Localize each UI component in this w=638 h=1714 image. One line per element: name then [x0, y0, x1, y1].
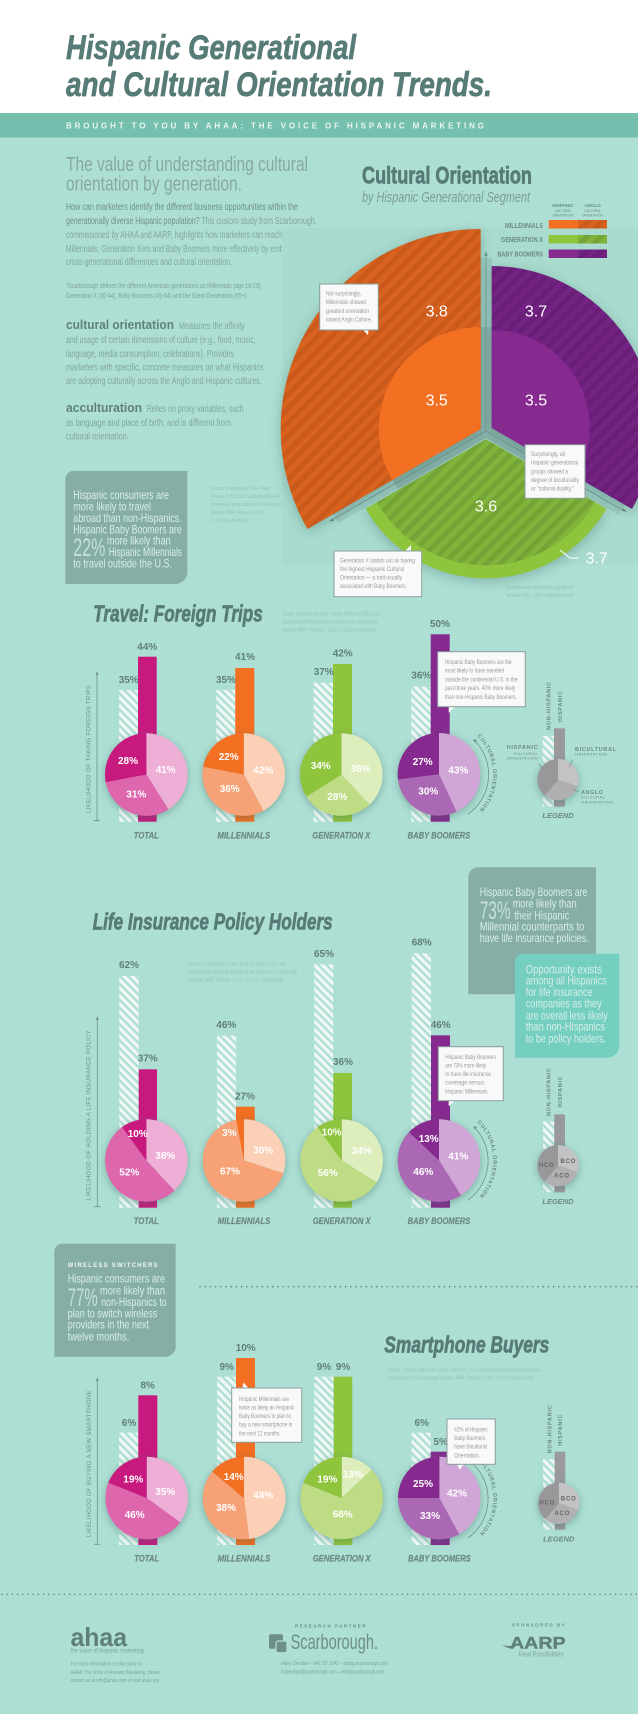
callout box: life insurance 73%: more likely than	[513, 897, 577, 911]
insurance chart: generation x: 34%	[352, 1146, 372, 1157]
sector: baby boomers	[492, 266, 638, 509]
axis: travel likelihood: LIKELIHOOD OF TAKING FOREIGN TRIPS	[86, 684, 92, 813]
travel chart: generation x: 37%	[314, 667, 334, 678]
callout box: life insurance 73%: Millennial counterparts to	[480, 920, 585, 934]
footer: scarborough	[269, 1623, 388, 1675]
legend: smartphone: LEGEND	[543, 1535, 575, 1544]
callout box: travel 22%: 22%	[73, 534, 105, 562]
callout: generation x: Generation X stands out as having	[340, 558, 415, 564]
legend: travel: CULTURAL	[514, 751, 538, 756]
callout box: opportunity: among all Hispanics	[526, 974, 607, 988]
callout: millennials	[320, 284, 378, 335]
callout: biculturality: or "cultural duality."	[531, 486, 575, 493]
title: Hispanic Generational	[66, 29, 357, 67]
smartphone chart: baby boomers: 5%	[433, 1437, 448, 1448]
travel chart: millennials: 42%	[253, 766, 273, 776]
dotted divider	[2, 1593, 638, 1595]
note: statistical significance: between 90% – 95% confidence levels	[506, 593, 574, 599]
insurance chart: generation x	[300, 949, 383, 1227]
legend: travel: ORIENTATION	[581, 799, 613, 804]
travel chart: baby boomers: 27%	[413, 757, 433, 768]
definition: acculturation: Relies on proxy variables, such	[147, 404, 244, 415]
smartphone chart: total	[105, 1380, 188, 1565]
callout box: travel 22%	[65, 471, 187, 584]
source note: cultural orientation: proprietary study based on Scarborough	[211, 502, 282, 508]
callout box: wireless switchers: plan to switch wireless	[68, 1306, 157, 1320]
callout box: wireless switchers	[54, 1244, 176, 1357]
travel chart: baby boomers: BABY BOOMERS	[408, 830, 471, 841]
insurance chart: millennials: 3%	[222, 1128, 237, 1139]
source note: travel	[282, 611, 379, 633]
travel chart: total	[105, 642, 188, 841]
callout box: travel 22%: more likely than	[107, 533, 171, 547]
banner: brought to you by	[0, 113, 638, 138]
callout box: life insurance 73%: Hispanic Baby Boomers are	[480, 885, 588, 899]
smartphone chart: generation x: GENERATION X	[313, 1554, 371, 1565]
travel chart: generation x	[300, 648, 383, 841]
source note: smartphone: study based on Scarborough Hispanic MRR, Release 1 2012. © 2012 Scarborough	[388, 1375, 533, 1382]
callout box: life insurance 73%	[468, 867, 596, 994]
radial chart: cultural orientation by generation	[281, 229, 638, 578]
travel chart: generation x: 38%	[351, 764, 371, 775]
footer: scarborough: RESEARCH PARTNER	[295, 1623, 367, 1628]
callout: generation x	[334, 545, 422, 597]
legend: generation colours: CULTURAL	[584, 209, 601, 213]
insurance chart: baby boomers: 68%	[412, 938, 432, 948]
source note: smartphone	[388, 1368, 542, 1382]
legend: insurance: HCO	[539, 1163, 555, 1169]
legend: generation colours: ORIENTATION	[582, 214, 604, 218]
travel chart: baby boomers: 30%	[418, 786, 438, 798]
smartphone chart: millennials: 9%	[219, 1362, 234, 1373]
legend: travel: HISPANIC	[558, 691, 564, 722]
source note: life insurance: Scarborough/AHAA proprietary study based on Scarborough	[188, 970, 297, 976]
intro body text: Millennials, Generation Xers and Baby Boomers more effectively by embracing	[66, 244, 302, 255]
travel chart: generation x: 28%	[327, 792, 347, 803]
insurance chart: total	[105, 960, 188, 1227]
heading: cultural orientation chart: Cultural Orientation	[362, 162, 532, 190]
callout: smartphone millennials: the next 12 months.	[239, 1430, 281, 1437]
callout box: wireless switchers: 77%	[68, 1284, 98, 1312]
legend: smartphone	[538, 1405, 579, 1544]
legend: insurance: HISPANIC	[558, 1076, 564, 1107]
callout: insurance baby boomers	[438, 1047, 503, 1106]
footer: aarp	[502, 1623, 566, 1658]
section heading: travel: Travel: Foreign Trips	[93, 601, 263, 627]
footnote: generation definitions: *Scarborough defines the different American generations as Millennials (age 18-29),	[66, 283, 262, 290]
callout box: travel 22%: to travel outside the U.S.	[73, 557, 172, 571]
insurance chart: baby boomers	[398, 938, 480, 1227]
callout: smartphone millennials	[232, 1382, 302, 1442]
axis: life insurance likelihood	[87, 1016, 100, 1207]
footer: ahaa: ahaa	[70, 1622, 128, 1652]
sector values: 3.7	[586, 551, 608, 568]
travel chart: millennials: 35%	[216, 675, 236, 686]
source note: life insurance	[188, 962, 297, 984]
callout: travel baby boomers: outside the continental U.S. in the	[445, 676, 518, 684]
insurance chart: total: 37%	[138, 1054, 158, 1064]
axis: smartphone likelihood: LIKELIHOOD OF BUYING A NEW SMARTPHONE	[87, 1389, 93, 1537]
insurance chart: millennials: 30%	[253, 1146, 273, 1156]
insurance chart: baby boomers: BABY BOOMERS	[408, 1216, 471, 1227]
sector values: 3.5	[426, 393, 448, 410]
definition: acculturation: as language and place of birth, and is different from	[66, 418, 231, 429]
insurance chart: total: TOTAL	[134, 1216, 159, 1227]
insurance chart: baby boomers: 13%	[419, 1134, 439, 1145]
heading: cultural orientation chart	[362, 162, 532, 206]
smartphone chart: millennials: 14%	[224, 1472, 244, 1483]
sector values: 3.7	[525, 304, 547, 320]
legend: generation colours: CULTURAL	[555, 209, 572, 213]
callout box: wireless switchers: twelve months.	[68, 1329, 129, 1343]
callout box: travel 22%: abroad than non-Hispanics.	[73, 511, 182, 525]
legend: insurance: BCO	[560, 1159, 576, 1165]
intro heading: orientation by generation.	[66, 174, 242, 196]
heading: cultural orientation chart: by Hispanic Generational Segment	[362, 189, 531, 206]
source note: travel: Source: Scarborough USA+ Study, Release 2 2012 and	[282, 611, 379, 617]
insurance chart: generation x: 36%	[333, 1057, 353, 1068]
insurance chart: baby boomers: 41%	[448, 1152, 468, 1162]
callout: smartphone millennials: Hispanic Millennials are	[239, 1396, 289, 1403]
legend: travel: ANGLO	[581, 790, 604, 796]
legend: travel	[507, 682, 617, 820]
legend: travel: CULTURAL	[581, 794, 606, 800]
callout: smartphone baby boomers: Orientation.	[454, 1452, 480, 1459]
callout: smartphone baby boomers	[447, 1419, 495, 1470]
sector values: 3.5	[525, 393, 547, 410]
callout box: travel 22%: Hispanic Baby Boomers are	[73, 522, 182, 536]
sector: generation x	[366, 439, 606, 578]
callout box: wireless switchers: non-Hispanics to	[101, 1295, 167, 1309]
sector: millennials	[281, 229, 481, 529]
travel chart: total: TOTAL	[134, 830, 159, 841]
legend: travel: ORIENTATION	[507, 756, 538, 760]
source note: cultural orientation	[211, 486, 282, 524]
note: statistical significance: Findings were statistically significant	[506, 585, 573, 591]
callout: biculturality: Hispanic generational	[531, 460, 578, 467]
smartphone chart: baby boomers: 42%	[447, 1488, 467, 1500]
source note: life insurance: Hispanic MRR, Release 1 2012. © 2012 Scarborough	[188, 977, 283, 984]
insurance chart: millennials: 67%	[220, 1166, 240, 1178]
legend: generation colours: ORIENTATION	[552, 214, 574, 218]
callout: insurance baby boomers: to have life insurance	[445, 1071, 491, 1078]
source note: life insurance: Source: Scarborough USA+ Study, Release 2 2012 and	[188, 962, 286, 968]
source note: cultural orientation: © 2012 Scarborough	[211, 517, 248, 524]
callout: smartphone baby boomers: have Bicultural	[454, 1444, 487, 1451]
callout: smartphone millennials: twice as likely as Hispanic	[239, 1405, 295, 1412]
smartphone chart: baby boomers: 6%	[414, 1418, 429, 1429]
insurance chart: generation x: GENERATION X	[313, 1216, 371, 1227]
intro heading: The value of understanding cultural	[66, 154, 308, 176]
footer: aarp: Real Possibilities	[519, 1651, 564, 1658]
legend: insurance: LEGEND	[542, 1197, 574, 1206]
section heading: life insurance: Life Insurance Policy Holders	[93, 908, 333, 934]
banner: brought to you by: BROUGHT TO YOU BY AHAA: THE VOICE OF HISPANIC MARKETING	[66, 122, 484, 131]
callout: smartphone baby boomers: Baby Boomers	[454, 1435, 486, 1442]
callout box: opportunity: Opportunity exists	[526, 962, 602, 976]
callout: travel baby boomers	[438, 652, 525, 713]
intro body text: commissioned by AHAA and AARP, highlights how marketers can reach Hispanic	[66, 230, 310, 241]
callout: biculturality: groups showed a	[531, 468, 568, 475]
legend: generation colours: GENERATION X	[501, 237, 543, 244]
smartphone chart: total: 8%	[140, 1380, 155, 1392]
arc: cultural orientation insurance: CULTURAL ORIENTATION	[478, 1120, 497, 1198]
smartphone chart: generation x: 9%	[317, 1362, 331, 1373]
definition: cultural orientation: and usage of certain dimensions of culture (e.g., food, music,	[66, 335, 256, 346]
footer: ahaa: the voice of hispanic marketing	[70, 1648, 144, 1655]
travel chart: generation x: GENERATION X	[312, 830, 371, 841]
travel chart: millennials: 22%	[219, 752, 239, 763]
legend: smartphone: NON-HISPANIC	[548, 1405, 554, 1453]
definition: cultural orientation: Measures the affinity	[179, 321, 245, 332]
insurance chart: total: 62%	[119, 960, 139, 971]
legend: smartphone: BCO	[561, 1496, 577, 1502]
smartphone chart: millennials	[203, 1343, 286, 1565]
callout box: life insurance 73%: have life insurance policies.	[480, 931, 589, 945]
legend: travel: NON-HISPANIC	[546, 682, 552, 730]
axis: smartphone likelihood	[87, 1377, 100, 1544]
footnote: generation definitions: Generation X (30-44), Baby Boomers (45-64) and the Silent Generation (65+).	[66, 293, 248, 300]
smartphone chart: generation x	[300, 1362, 383, 1565]
legend: generation colours: ANGLO	[585, 203, 601, 208]
smartphone chart: total: 19%	[123, 1474, 143, 1486]
title	[66, 29, 492, 104]
legend: generation colours: HISPANIC	[552, 203, 574, 208]
callout: smartphone baby boomers: 42% of Hispanic	[454, 1426, 488, 1433]
callout box: life insurance 73%: 73%	[480, 897, 511, 925]
smartphone chart: baby boomers	[398, 1418, 481, 1565]
legend: insurance: NON-HISPANIC	[546, 1068, 552, 1116]
legend: generation colours	[497, 203, 607, 258]
callout: insurance baby boomers: Hispanic Baby Boomers	[445, 1054, 497, 1061]
intro heading	[66, 154, 308, 196]
callout: millennials: Millennials showed	[326, 299, 366, 306]
callout: generation x: associated with Baby Boomers.	[340, 583, 407, 590]
callout box: life insurance 73%: their Hispanic	[514, 908, 569, 922]
footer: scarborough: Haley Derrilian – 646.737.1042 – dialog.scarborough.com	[281, 1661, 388, 1667]
smartphone chart: millennials: 48%	[253, 1490, 273, 1502]
arc: cultural orientation smartphone: CULTURAL ORIENTATION	[480, 1464, 498, 1536]
insurance chart: total: 52%	[119, 1168, 139, 1178]
legend: smartphone: HCO	[539, 1500, 555, 1506]
smartphone chart: baby boomers: BABY BOOMERS	[408, 1554, 471, 1565]
legend: generation colours: BABY BOOMERS	[497, 252, 543, 258]
footer: scarborough: Scarborough.	[291, 1631, 378, 1654]
footer: aarp: SPONSORED BY	[512, 1623, 566, 1628]
sector values: 3.6	[475, 498, 497, 516]
insurance chart: generation x: 10%	[322, 1128, 342, 1138]
legend: smartphone: ACO	[554, 1511, 570, 1517]
callout box: wireless switchers: WIRELESS SWITCHERS	[68, 1263, 158, 1269]
legend: travel: BICULTURAL	[575, 747, 617, 753]
callout box: opportunity: to be policy holders.	[526, 1031, 606, 1045]
callout: smartphone millennials: Baby Boomers to plan to	[239, 1413, 291, 1420]
smartphone chart: total: 6%	[122, 1418, 136, 1429]
callout: insurance baby boomers: coverage versus	[445, 1080, 485, 1087]
callout: generation x: Orientation — a trait usually	[340, 575, 403, 582]
callout box: wireless switchers: providers in the next	[68, 1318, 149, 1332]
smartphone chart: millennials: 10%	[236, 1343, 256, 1354]
definition: acculturation: acculturation	[66, 400, 142, 415]
callout: insurance baby boomers: Hispanic Millennials.	[445, 1088, 489, 1095]
insurance chart: total: 38%	[155, 1151, 175, 1162]
legend: insurance	[537, 1068, 579, 1206]
callout: generation x: the highest Hispanic Cultural	[340, 566, 404, 573]
travel chart: total: 41%	[156, 765, 176, 776]
travel chart: total: 28%	[118, 756, 138, 767]
insurance chart: baby boomers: 46%	[431, 1020, 451, 1031]
source note: cultural orientation: Release 2 2012 and Scarborough/AHAA	[211, 494, 280, 500]
smartphone chart: millennials: 38%	[216, 1503, 236, 1514]
callout box: opportunity: for life insurance	[526, 985, 593, 999]
callout box: travel 22%: more likely to travel	[73, 500, 151, 514]
definition: acculturation	[66, 400, 244, 442]
insurance chart: generation x: 56%	[318, 1168, 338, 1179]
callout: biculturality	[525, 445, 585, 498]
callout box: opportunity: are overall less likely	[526, 1008, 608, 1022]
travel chart: total: 31%	[126, 790, 146, 800]
callout: millennials: Not surprisingly,	[326, 290, 361, 298]
travel chart: baby boomers: 43%	[448, 766, 468, 776]
travel chart: baby boomers: 36%	[411, 670, 431, 682]
callout box: opportunity	[515, 954, 619, 1058]
axis: life insurance likelihood: LIKELIHOOD OF HOLDING A LIFE INSURANCE POLICY	[87, 1029, 93, 1200]
arc: cultural orientation travel: CULTURAL ORIENTATION	[478, 734, 497, 812]
smartphone chart: total: 46%	[125, 1510, 145, 1521]
source note: cultural orientation: Hispanic MRR, Release 1 2012.	[211, 510, 264, 516]
definition: cultural orientation	[66, 317, 264, 387]
sector values: 3.8	[426, 304, 448, 320]
smartphone chart: generation x: 19%	[317, 1474, 337, 1486]
callout: millennials: greatest orientation	[326, 308, 369, 315]
definition: cultural orientation: marketers with specific, concrete measures on what Hispanics	[66, 362, 264, 374]
travel chart: generation x: 34%	[311, 761, 331, 772]
callout: travel baby boomers: past three years. 40% more likely	[445, 685, 516, 692]
smartphone chart: baby boomers: 33%	[420, 1511, 440, 1522]
legend: travel: ORIENTATION	[575, 752, 607, 756]
travel chart: millennials: 41%	[235, 652, 255, 663]
source note: travel: Hispanic MRR, Release 1 2012. © 2012 Scarborough	[282, 626, 376, 633]
callout box: opportunity: than non-Hispanics	[526, 1020, 605, 1034]
travel chart: millennials	[202, 652, 285, 841]
section heading: smartphone: Smartphone Buyers	[384, 1332, 549, 1358]
travel chart: total: 44%	[137, 642, 157, 653]
smartphone chart: baby boomers: 25%	[413, 1479, 433, 1490]
smartphone chart: millennials: MILLENNIALS	[218, 1554, 271, 1565]
note: statistical significance	[506, 585, 574, 599]
source note: cultural orientation: Source: Scarborough USA+ Study	[211, 486, 270, 492]
footer: aarp: AARP	[510, 1633, 566, 1652]
travel chart: millennials: MILLENNIALS	[217, 830, 271, 841]
callout: biculturality: degree of biculturality	[531, 477, 580, 484]
travel chart: total: 35%	[119, 675, 139, 686]
smartphone chart: generation x: 13%	[343, 1470, 363, 1480]
footer: ahaa: AHAA: The Voice of Hispanic Marketing, please	[70, 1670, 160, 1676]
legend: smartphone: HISPANIC	[558, 1415, 564, 1446]
travel chart: generation x: 42%	[333, 648, 353, 660]
definition: cultural orientation: language, media consumption, celebrations). Provides	[66, 349, 234, 360]
footer: scarborough: haberrilian@scarborough.com – info@scarborough.com	[281, 1669, 384, 1675]
smartphone chart: total: TOTAL	[134, 1554, 159, 1565]
callout box: wireless switchers: more likely than	[100, 1283, 165, 1297]
smartphone chart: generation x: 68%	[333, 1510, 353, 1520]
insurance chart: total: 10%	[128, 1129, 148, 1140]
intro body text	[66, 202, 316, 268]
callout: travel baby boomers: than non-Hispanic Baby Boomers.	[445, 694, 517, 701]
intro body text: cross-generational differences and cultural orientation.	[66, 257, 232, 268]
source note: travel: Scarborough/AHAA proprietary study based on Scarborough	[282, 619, 378, 625]
callout box: wireless switchers: Hispanic consumers are	[68, 1272, 165, 1286]
insurance chart: millennials: 27%	[235, 1092, 255, 1102]
insurance chart: generation x: 65%	[314, 949, 334, 960]
legend: travel: HISPANIC	[507, 745, 538, 751]
travel chart: millennials: 36%	[220, 784, 240, 795]
definition: acculturation: cultural orientation.	[66, 431, 129, 442]
callout: millennials: toward Anglo Culture.	[326, 316, 372, 324]
callout box: opportunity: companies as they	[526, 997, 602, 1011]
insurance chart: millennials: MILLENNIALS	[218, 1216, 271, 1227]
legend: travel: LEGEND	[542, 811, 574, 820]
arc: cultural orientation smartphone	[468, 1464, 498, 1538]
insurance chart: millennials: 46%	[216, 1020, 236, 1031]
callout box: travel 22%: Hispanic consumers are	[73, 488, 169, 502]
callout: insurance baby boomers: are 73% more likely	[445, 1063, 487, 1070]
callout: travel baby boomers: Hispanic Baby Boomers are the	[445, 659, 512, 666]
definition: cultural orientation: cultural orientation	[66, 317, 174, 332]
sector values	[426, 304, 608, 568]
smartphone chart: generation x: 9%	[336, 1362, 350, 1373]
definition: cultural orientation: are adopting culturally across the Anglo and Hispanic cultures.	[66, 376, 262, 387]
dotted divider	[200, 1286, 638, 1288]
smartphone chart: total: 35%	[155, 1487, 175, 1498]
footer: ahaa: contact us at info@ahaa.com or visit ahaa.org	[70, 1678, 159, 1684]
intro body text: generationally diverse Hispanic population? This custom study from Scarborough,	[66, 216, 316, 227]
travel chart: baby boomers	[398, 619, 480, 841]
callout: smartphone millennials: buy a new smartphone in	[239, 1422, 293, 1429]
footer: ahaa	[70, 1622, 160, 1684]
legend: insurance: ACO	[554, 1173, 570, 1179]
callout box: travel 22%: Hispanic Millennials	[109, 545, 182, 559]
title: and Cultural Orientation Trends.	[66, 66, 492, 104]
insurance chart: baby boomers: 46%	[413, 1167, 433, 1178]
intro body text: How can marketers identify the different business opportunities within the	[66, 202, 298, 213]
callout: biculturality: Surprisingly, all	[531, 451, 565, 458]
source note: smartphone: Source: Scarborough USA+ Study, Release 2 2012 and Scarborough/AHAA proprietary	[388, 1368, 542, 1374]
axis: travel likelihood	[86, 671, 100, 821]
callout: travel baby boomers: most likely to have traveled	[445, 668, 504, 674]
footer: ahaa: For more information on this study or	[70, 1662, 142, 1668]
insurance chart: millennials	[203, 1020, 285, 1227]
legend: generation colours: MILLENNIALS	[505, 223, 543, 230]
travel chart: baby boomers: 50%	[430, 619, 450, 630]
footnote: generation definitions	[66, 283, 262, 300]
